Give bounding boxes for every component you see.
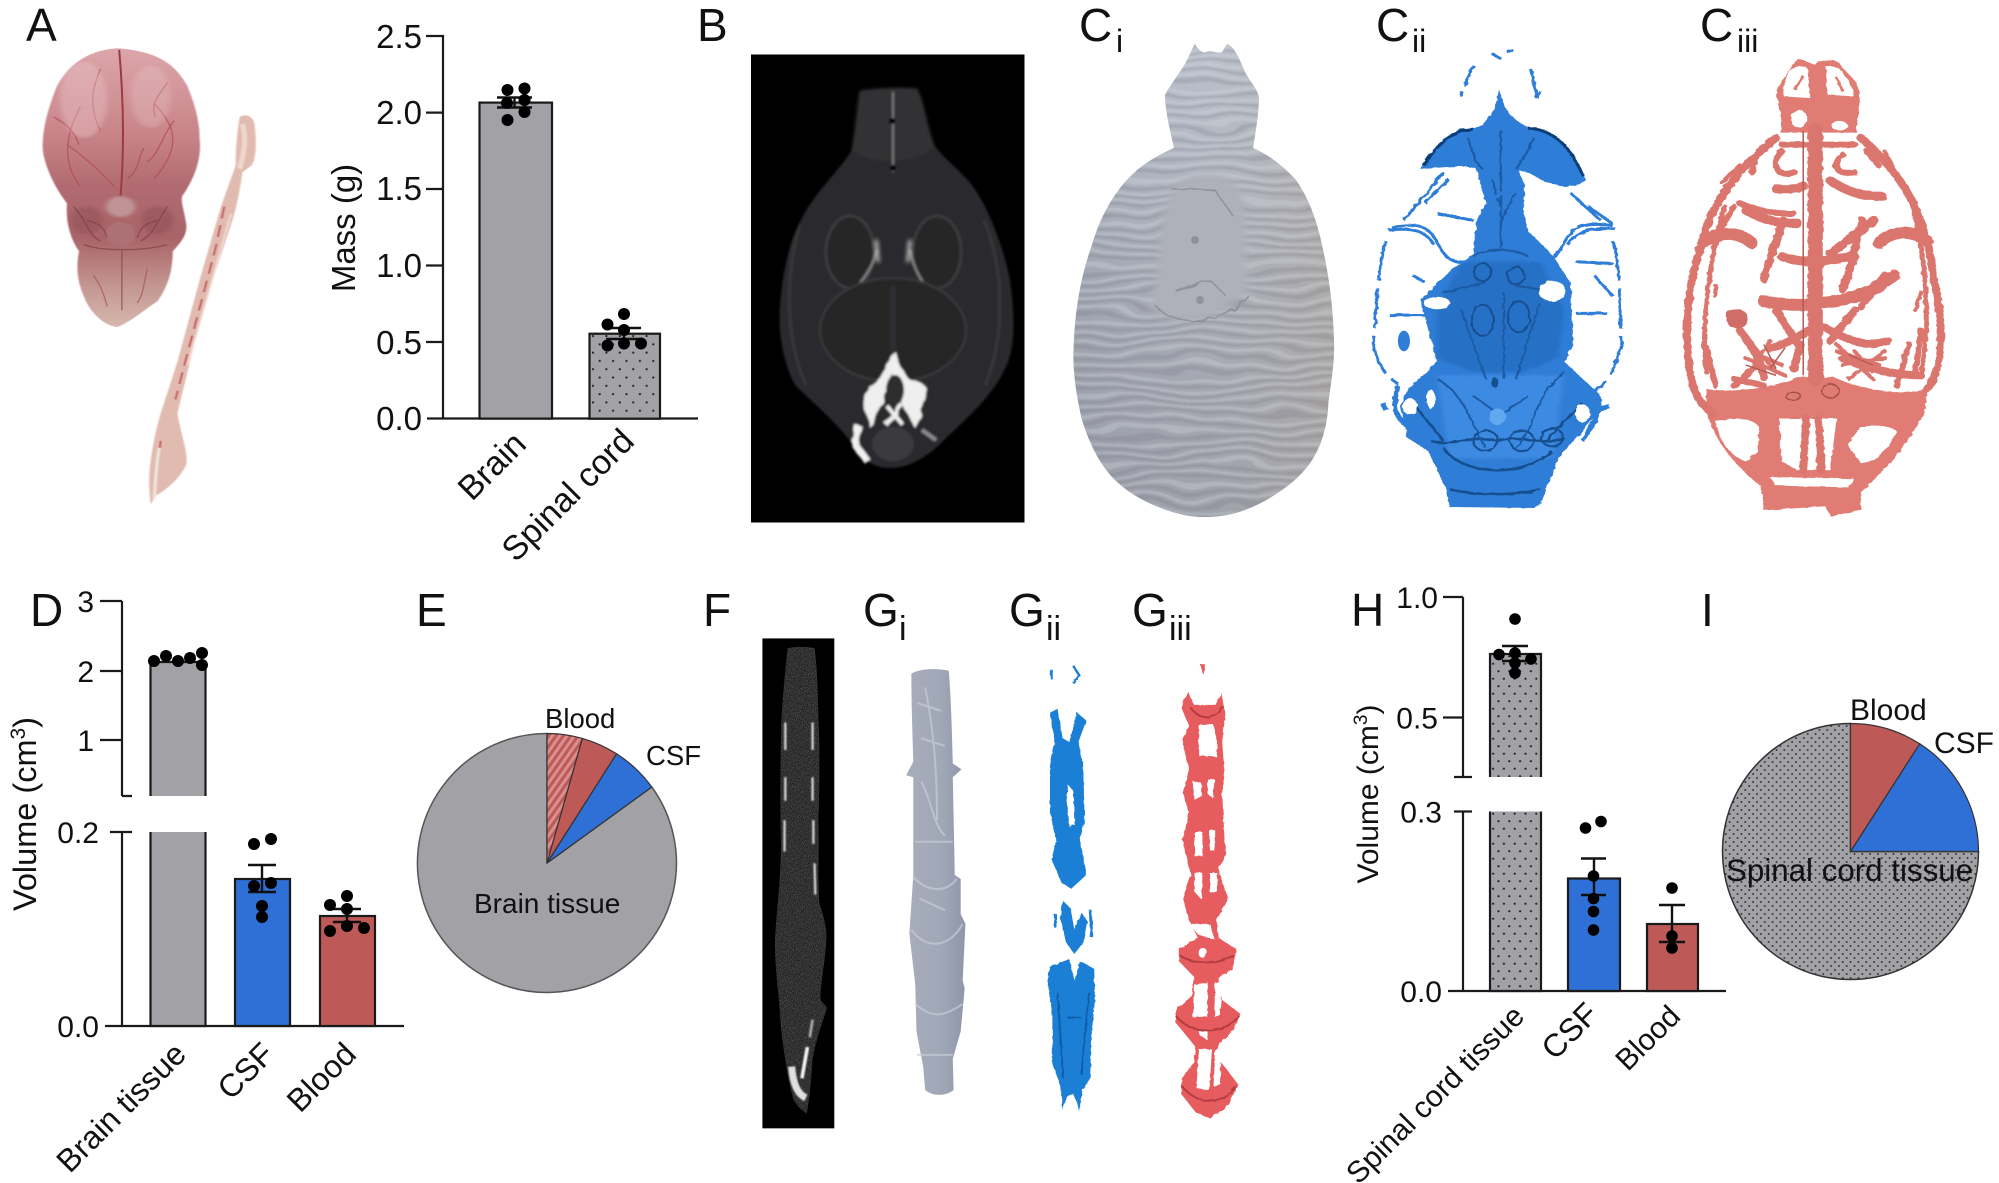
cord surface	[906, 669, 965, 1095]
y tick labels: 2	[77, 656, 94, 689]
y axis title: 3	[1351, 715, 1372, 725]
x label: spinal cord: Spinal cord	[495, 422, 642, 569]
y tick labels: 0.0	[57, 1011, 99, 1044]
panel label G-iii: iii	[1169, 610, 1192, 648]
3D render: brain CSF	[1374, 50, 1622, 508]
CSF upper segment	[1050, 709, 1086, 889]
CSF mid fragments	[1056, 910, 1092, 938]
panel label C-i: i	[1116, 23, 1123, 59]
CSF peripheral vessels and fragments	[1374, 50, 1622, 441]
CSF fragments	[1052, 666, 1079, 683]
bar: CSF	[235, 879, 290, 1026]
y tick labels	[57, 586, 99, 1044]
panel label G-i: i	[899, 610, 907, 648]
panel label C-iii: iii	[1737, 23, 1758, 59]
panel label C-ii: ii	[1412, 23, 1426, 59]
y axis title: )	[7, 717, 43, 728]
y tick labels: 3	[77, 586, 94, 619]
x label: blood: Blood	[280, 1035, 363, 1119]
3D render: brain blood vessels	[1687, 59, 1941, 517]
y tick labels: 0.3	[1400, 796, 1442, 830]
panel label D: D	[30, 584, 63, 636]
y tick labels: 1.0	[376, 247, 422, 284]
y tick labels: 2.5	[376, 18, 422, 55]
error bar and data points: blood	[324, 890, 370, 937]
y tick labels: 0.0	[1400, 976, 1442, 1009]
y tick labels	[376, 18, 422, 437]
y tick labels: 0.5	[1396, 702, 1438, 736]
pie label: blood: Blood	[545, 703, 615, 734]
slice: spinal cord tissue	[1722, 724, 1978, 980]
panel label G-ii: ii	[1046, 610, 1061, 648]
bar: spinal cord tissue	[1490, 654, 1541, 991]
panel label I: I	[1701, 584, 1714, 636]
pie chart: brain composition	[417, 703, 701, 992]
photo: brain and spinal cord	[43, 48, 256, 505]
error bar and data points: blood	[1659, 882, 1685, 954]
photo: excised spinal cord	[149, 115, 256, 505]
panel label G-iii: G	[1132, 584, 1168, 636]
bar: blood	[1647, 924, 1698, 991]
y tick labels: 1	[77, 725, 94, 758]
y axis title: Volume (cm	[1352, 725, 1385, 883]
bar: CSF	[1568, 878, 1620, 991]
error bars and data points: spinal cord	[602, 308, 647, 352]
3D render: spinal cord tissue	[906, 669, 965, 1095]
3D render: spinal CSF	[1048, 666, 1095, 1112]
x label: brain: Brain	[451, 425, 534, 508]
3D render: spinal blood vessels	[1175, 664, 1240, 1118]
CSF blob	[1398, 331, 1410, 351]
x label: CSF: CSF	[1534, 995, 1605, 1066]
slice: CSF	[1850, 744, 1978, 852]
CSF main body	[1401, 90, 1598, 508]
photo: excised brain	[43, 48, 200, 327]
bar: brain	[480, 103, 552, 419]
pie label: CSF: CSF	[646, 740, 701, 771]
bar chart: organ mass	[325, 18, 698, 569]
x label: blood: Blood	[1609, 1000, 1687, 1077]
vessel shading	[1176, 707, 1239, 1101]
slice: blood	[547, 738, 616, 863]
slice: blood hatched	[547, 734, 582, 863]
y tick labels: 0.0	[376, 400, 422, 437]
y tick labels: 2.0	[376, 94, 422, 131]
vessels	[1687, 59, 1941, 517]
slice: brain tissue	[417, 734, 676, 992]
pie label: brain tissue: Brain tissue	[474, 888, 620, 919]
data points: brain tissue	[148, 647, 208, 671]
MRI cord section	[775, 647, 827, 1113]
panel label G-i: G	[863, 584, 899, 636]
error bar and data points: spinal cord tissue	[1493, 613, 1537, 679]
top fragment	[1200, 664, 1206, 675]
CSF mid segment	[1060, 900, 1088, 954]
panel label F: F	[703, 584, 731, 636]
panel label B: B	[697, 0, 728, 51]
y axis with break	[100, 601, 404, 1026]
vessel openings	[1189, 724, 1223, 1090]
y tick labels: 1.0	[1396, 582, 1438, 615]
pie chart: spinal cord composition	[1722, 694, 1994, 980]
error bars and data points: brain	[497, 82, 532, 126]
surface body	[1073, 44, 1334, 517]
y axis title: Volume (cm	[7, 739, 43, 911]
y axis title: 3	[7, 728, 30, 739]
y tick labels: 0.5	[376, 324, 422, 361]
pie label: spinal cord tissue: Spinal cord tissue	[1726, 853, 1973, 888]
pie label: blood: Blood	[1850, 694, 1927, 727]
bar: spinal cord	[590, 334, 660, 419]
surface shading and terracing	[1074, 44, 1334, 516]
y axis with break	[1443, 597, 1726, 991]
bar chart: brain compartment volumes	[7, 586, 404, 1179]
bar chart: spinal cord compartment volumes	[1340, 582, 1726, 1183]
panel label C-ii: C	[1376, 0, 1409, 51]
y axis title: Mass (g)	[325, 164, 362, 292]
CSF upper holes	[1067, 785, 1074, 827]
3D render: brain tissue surface	[1073, 44, 1334, 517]
panel label H: H	[1351, 584, 1384, 636]
error bar and data points: CSF	[248, 833, 277, 923]
MRI brain section	[780, 88, 1014, 468]
pie label: CSF: CSF	[1934, 727, 1994, 760]
panel label G-ii: G	[1009, 584, 1045, 636]
y tick labels: 0.2	[57, 817, 99, 850]
CSF lower segment	[1048, 959, 1095, 1112]
x label: brain tissue: Brain tissue	[49, 1035, 193, 1179]
error bar and data points: CSF	[1580, 816, 1607, 936]
bar: blood	[320, 916, 375, 1026]
y tick labels	[1396, 582, 1442, 1009]
vessel column	[1175, 691, 1240, 1118]
slice: blood	[1850, 724, 1920, 852]
CSF holes	[1403, 281, 1590, 422]
y tick labels: 1.5	[376, 170, 422, 207]
y axis title: )	[1352, 705, 1385, 715]
MRI background	[751, 54, 1024, 522]
panel label C-iii: C	[1700, 0, 1733, 51]
slice: CSF	[547, 754, 652, 863]
x label: CSF: CSF	[210, 1035, 281, 1106]
dark vessel accents	[1746, 131, 1873, 375]
MRI background	[762, 638, 834, 1128]
panel label A: A	[26, 0, 57, 51]
MRI: spinal cord	[762, 638, 834, 1128]
y axis: mass	[426, 36, 698, 418]
panel label E: E	[416, 584, 447, 636]
CSF lower shading	[1057, 992, 1089, 1078]
MRI: brain	[751, 54, 1024, 522]
cord ridges	[911, 687, 963, 1055]
bar: brain tissue	[150, 662, 206, 1026]
panel label C-i: C	[1079, 0, 1112, 51]
